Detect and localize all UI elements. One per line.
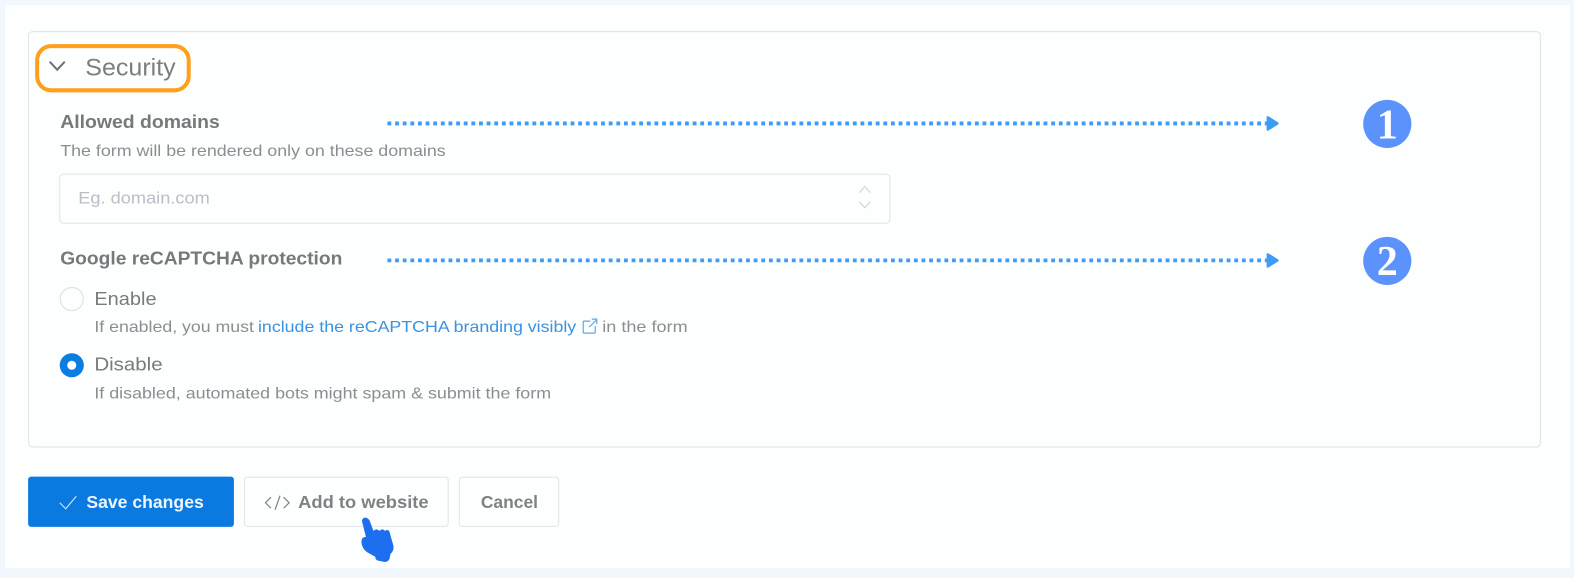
arrow: recaptcha to step 2	[387, 254, 1277, 266]
radio option: enable: include the reCAPTCHA branding visibly	[258, 319, 576, 336]
input: domain field	[60, 174, 890, 223]
badge: number 2	[1363, 237, 1411, 285]
text: google recaptcha protection: Google reCAPTCHA protection	[60, 248, 342, 268]
panel: security settings	[29, 32, 1540, 447]
icon: pointing hand cursor	[361, 518, 394, 562]
input: domain field: Eg. domain.com	[78, 189, 210, 208]
radio option: enable: in the form	[602, 319, 688, 336]
badge: number 1: 1	[1377, 101, 1398, 148]
text block: allowed domains: Allowed domains	[60, 112, 220, 132]
badge: number 2: 2	[1377, 238, 1398, 285]
radio option: enable: If enabled, you must	[94, 319, 255, 336]
text block: allowed domains: The form will be rendered only on these domains	[60, 143, 446, 160]
button: add to website	[244, 477, 448, 526]
button: cancel	[459, 477, 559, 526]
button: save changes	[28, 477, 234, 527]
button: cancel: Cancel	[481, 492, 538, 512]
button: add to website: Add to website	[298, 492, 429, 512]
badge: number 1	[1363, 100, 1411, 148]
button: save changes: Save changes	[86, 492, 204, 512]
arrow: allowed domains to step 1	[387, 117, 1277, 129]
radio option: enable	[60, 287, 688, 336]
radio option: enable: Enable	[94, 289, 157, 309]
radio option: disable: Disable	[94, 354, 163, 374]
text block: allowed domains	[60, 112, 446, 160]
heading: security with orange highlight	[37, 46, 189, 90]
radio option: disable: If disabled, automated bots might spam & submit the form	[94, 385, 551, 402]
radio option: disable	[60, 353, 551, 402]
heading: security with orange highlight: Security	[85, 54, 176, 81]
